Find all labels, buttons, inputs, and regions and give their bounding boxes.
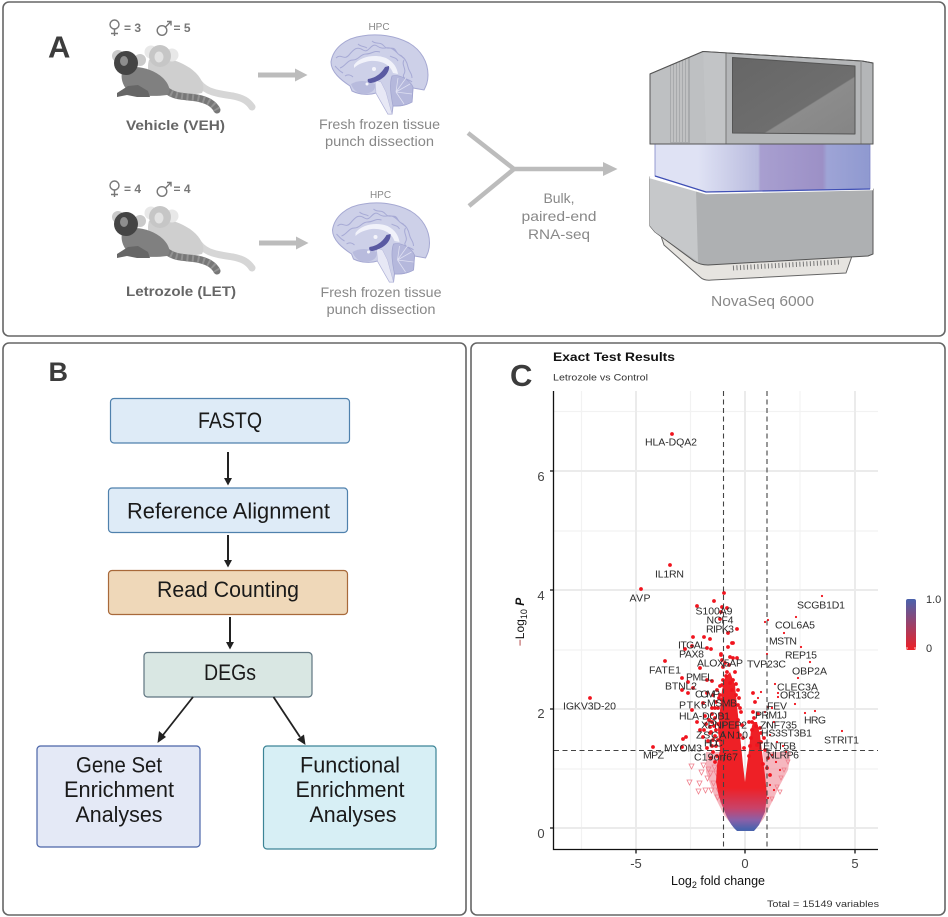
box: Functional Enrichment Analyses: Analyses xyxy=(310,802,396,827)
y axis title: P xyxy=(513,597,527,609)
arrow xyxy=(224,452,232,486)
gene labels: SCGB1D1 xyxy=(797,600,845,612)
gene labels: FATE1 xyxy=(649,664,681,676)
gene labels: ZSCAN10 xyxy=(696,730,748,742)
arrow: vehicle to brain xyxy=(258,68,308,82)
arrow: merge to sequencer xyxy=(468,133,618,206)
gene labels: PAX8 xyxy=(679,648,704,660)
y axis title: −Log xyxy=(513,619,527,646)
color legend: 1.0 xyxy=(926,594,941,606)
text: dissection letrozole: Fresh frozen tissue xyxy=(320,285,442,300)
label: NovaSeq 6000: NovaSeq 6000 xyxy=(711,293,814,310)
panel C: volcano plot xyxy=(471,343,945,915)
y tick labels: 0 xyxy=(537,826,545,841)
y tick labels xyxy=(537,469,545,841)
plot title: Exact Test Results xyxy=(553,352,675,364)
gene labels: IGKV3D-20 xyxy=(563,700,616,712)
gene labels: HDC xyxy=(704,738,723,750)
text: dissection letrozole: punch dissection xyxy=(326,302,436,317)
gene labels: NLRP6 xyxy=(767,750,799,762)
panel letter B: B xyxy=(48,357,68,387)
gene labels: PTK6 xyxy=(679,700,707,712)
gene labels: MPZ xyxy=(643,750,665,762)
gene labels: IL1RN xyxy=(655,568,684,580)
gene labels: OBP2A xyxy=(792,666,827,678)
arrow: DEGs to gene set xyxy=(158,697,193,743)
box: Functional Enrichment Analyses: Enrichment xyxy=(296,777,404,802)
gene labels: HRG xyxy=(804,714,826,726)
gene labels: CLEC3A xyxy=(777,682,818,694)
x tick labels: -5 xyxy=(630,856,642,871)
color legend: 0 xyxy=(926,643,932,655)
faint non-significant points xyxy=(706,752,791,830)
x axis title: 2 xyxy=(692,880,697,890)
sex counts: letrozole xyxy=(110,181,191,197)
panel A: study design xyxy=(3,2,945,336)
text: sequencing method: Bulk, xyxy=(543,190,575,206)
gene labels: TVP23C xyxy=(747,658,786,670)
box: Gene Set Enrichment Analyses: Analyses xyxy=(76,802,162,827)
icon: vehicle marmosets xyxy=(112,45,252,110)
gene labels: RIPK3 xyxy=(706,624,734,636)
text: dissection vehicle: Fresh frozen tissue xyxy=(319,117,440,132)
text: sequencing method: paired-end xyxy=(522,208,596,224)
caption: total variables: Total = 15149 variables xyxy=(767,899,879,910)
icon: letrozole marmosets xyxy=(112,206,252,271)
gene labels: ZNF735 xyxy=(760,720,797,732)
box: DEGs: DEGs xyxy=(204,660,256,685)
plot subtitle: Letrozole vs Control xyxy=(553,372,648,384)
arrow xyxy=(226,617,234,650)
box: Gene Set Enrichment Analyses: Gene Set xyxy=(76,752,162,778)
box: Gene Set Enrichment Analyses: Enrichment xyxy=(64,777,174,802)
box: Gene Set Enrichment Analyses xyxy=(37,746,200,847)
arrow xyxy=(224,535,232,568)
y tick labels: 4 xyxy=(537,588,545,603)
box: Read Counting xyxy=(108,570,348,614)
gene labels: ITGAL xyxy=(678,640,706,652)
gene labels: C19orf67 xyxy=(694,752,738,764)
box: Functional Enrichment Analyses xyxy=(264,746,436,849)
x axis title: Log xyxy=(671,874,692,888)
x tick labels xyxy=(630,856,859,871)
icon: brain vehicle xyxy=(331,35,428,114)
box: FASTQ xyxy=(110,398,350,443)
gene labels: HLA-DQB1 xyxy=(679,710,730,722)
color legend xyxy=(906,594,941,655)
box: Functional Enrichment Analyses: Functional xyxy=(300,752,400,778)
box: DEGs xyxy=(144,652,312,697)
icon: NovaSeq sequencer xyxy=(650,52,873,280)
gene labels: XPNPEP2 xyxy=(701,720,747,732)
label: HPC letrozole: HPC xyxy=(370,190,391,201)
gene labels: AVP xyxy=(630,592,650,604)
sex counts: vehicle xyxy=(110,20,191,36)
gene labels xyxy=(563,436,859,764)
text: dissection vehicle: punch dissection xyxy=(325,134,434,149)
gene labels: MSMB xyxy=(707,698,737,710)
label: Vehicle (VEH): Vehicle (VEH) xyxy=(126,117,225,133)
panel letter C: C xyxy=(510,358,532,393)
box: Reference Alignment xyxy=(108,488,348,532)
arrow: letrozole to brain xyxy=(259,236,308,250)
gene labels: COMP xyxy=(695,688,720,700)
y tick labels: 2 xyxy=(537,706,545,721)
y axis title: 10 xyxy=(519,609,529,619)
gene labels: PRM1J xyxy=(755,710,787,722)
gene labels: OR13C2 xyxy=(780,690,820,702)
panel B: analysis workflow xyxy=(3,343,466,915)
gene labels: S100A9 xyxy=(696,606,733,618)
sex counts: vehicle: = 3 xyxy=(124,21,141,35)
gene labels: STRIT1 xyxy=(824,734,859,746)
x axis title: fold change xyxy=(697,874,765,888)
dense point cloud xyxy=(716,672,767,831)
gene labels: COL6A5 xyxy=(775,620,815,632)
volcano chart xyxy=(513,391,878,890)
sex counts: vehicle: = 5 xyxy=(174,21,191,35)
gene labels: MSTN xyxy=(769,636,797,648)
box: FASTQ: FASTQ xyxy=(198,408,262,433)
text: sequencing method xyxy=(522,190,596,242)
text: dissection letrozole xyxy=(320,285,442,317)
gene labels: HLA-DQA2 xyxy=(645,436,697,448)
gene labels: FEV xyxy=(767,700,787,712)
threshold lines xyxy=(554,391,878,849)
icon: brain letrozole xyxy=(332,203,430,282)
label: HPC vehicle: HPC xyxy=(368,22,390,33)
gene labels: NCF4 xyxy=(706,614,734,626)
gene labels: MYOM3 xyxy=(664,742,702,754)
label: Letrozole (LET): Letrozole (LET) xyxy=(126,283,236,299)
panel letter A: A xyxy=(48,30,70,64)
sex counts: letrozole: = 4 xyxy=(124,182,141,196)
gene labels: HS3ST3B1 xyxy=(761,728,812,740)
gene labels: BTNL2 xyxy=(665,680,697,692)
y tick labels: 6 xyxy=(537,469,545,484)
significant points xyxy=(590,434,770,775)
gene labels: REP15 xyxy=(785,650,817,662)
text: dissection vehicle xyxy=(319,117,440,149)
axes xyxy=(550,391,878,854)
gene labels: PMEL xyxy=(686,672,713,684)
box: Read Counting: Read Counting xyxy=(157,577,299,602)
arrow: DEGs to functional xyxy=(274,697,306,745)
x tick labels: 5 xyxy=(851,856,859,871)
box: Reference Alignment: Reference Alignment xyxy=(127,498,330,524)
text: sequencing method: RNA-seq xyxy=(528,226,590,242)
gene labels: TENT5B xyxy=(757,740,796,752)
gene labels: ALOX5AP xyxy=(697,658,743,670)
x tick labels: 0 xyxy=(741,856,749,871)
sex counts: letrozole: = 4 xyxy=(174,182,191,196)
